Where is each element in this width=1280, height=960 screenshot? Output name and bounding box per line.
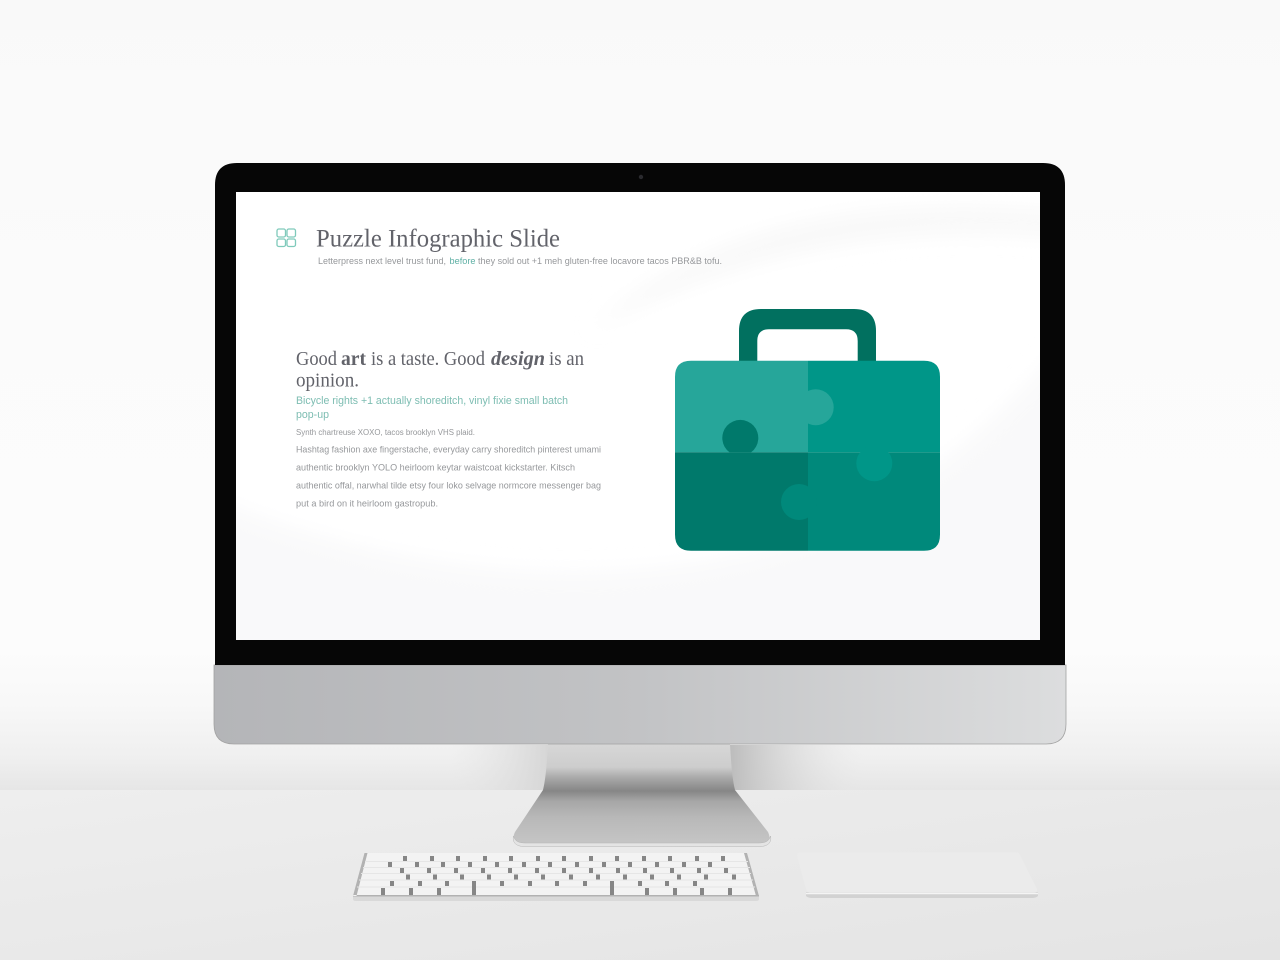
text block heading [296,348,584,392]
puzzle piece: top left [675,361,808,452]
puzzle piece: bottom left [675,452,808,551]
body paragraph: put a bird on it heirloom gastropub. [296,498,438,510]
puzzle tab: top left piece [798,389,834,425]
key gaps [381,856,736,895]
body paragraph: authentic offal, narwhal tilde etsy four loko selvage normcore messenger bag [296,480,601,492]
monitor stand [513,744,771,846]
trackpad [797,852,1038,898]
slide subtitle: before [450,256,476,266]
trackpad highlight [806,892,1038,894]
puzzle piece: top right [808,361,940,452]
webcam [639,175,643,179]
text block heading: design [491,348,545,370]
text block heading: is an [549,348,584,370]
puzzle piece: bottom right [808,452,940,551]
trackpad lip [806,892,1038,898]
monitor bezel [215,163,1065,665]
text block heading: Good [296,348,337,370]
briefcase handle [739,309,876,362]
teal subheading [296,395,568,421]
monitor chin [214,665,1066,744]
slide subtitle [318,256,722,266]
text block heading: art [341,348,366,370]
puzzle briefcase icon [675,309,940,551]
slide subtitle: Letterpress next level trust fund, [318,256,446,266]
key row lines [357,862,755,887]
teal subheading: Bicycle rights +1 actually shoreditch, vinyl fixie small batch [296,395,568,407]
text block heading: opinion. [296,370,359,392]
slide title: Puzzle Infographic Slide [316,226,560,252]
puzzle tab: bottom right piece [781,484,817,520]
body paragraph: Hashtag fashion axe fingerstache, everyday carry shoreditch pinterest umami [296,444,601,456]
body paragraph [296,444,601,510]
keyboard lip [353,895,759,901]
teal subheading: pop-up [296,409,329,421]
text block heading: is a taste. Good [371,348,485,370]
body paragraph: authentic brooklyn YOLO heirloom keytar waistcoat kickstarter. Kitsch [296,462,575,474]
slide screen [236,192,1040,640]
slide icon: four squares [277,229,296,246]
slide subtitle: they sold out +1 meh gluten-free locavore tacos PBR&B tofu. [478,256,722,266]
puzzle tab: top right piece [856,445,892,481]
stand shadow on wall [450,745,865,790]
keyboard [353,853,759,901]
trackpad surface [797,852,1037,892]
desk surface [0,790,1280,960]
puzzle tab: bottom left piece [722,420,758,452]
keyboard body [353,853,759,896]
keyboard edges [353,853,759,896]
small caption: Synth chartreuse XOXO, tacos brooklyn VHS plaid. [296,428,475,437]
monitor [190,163,1090,744]
